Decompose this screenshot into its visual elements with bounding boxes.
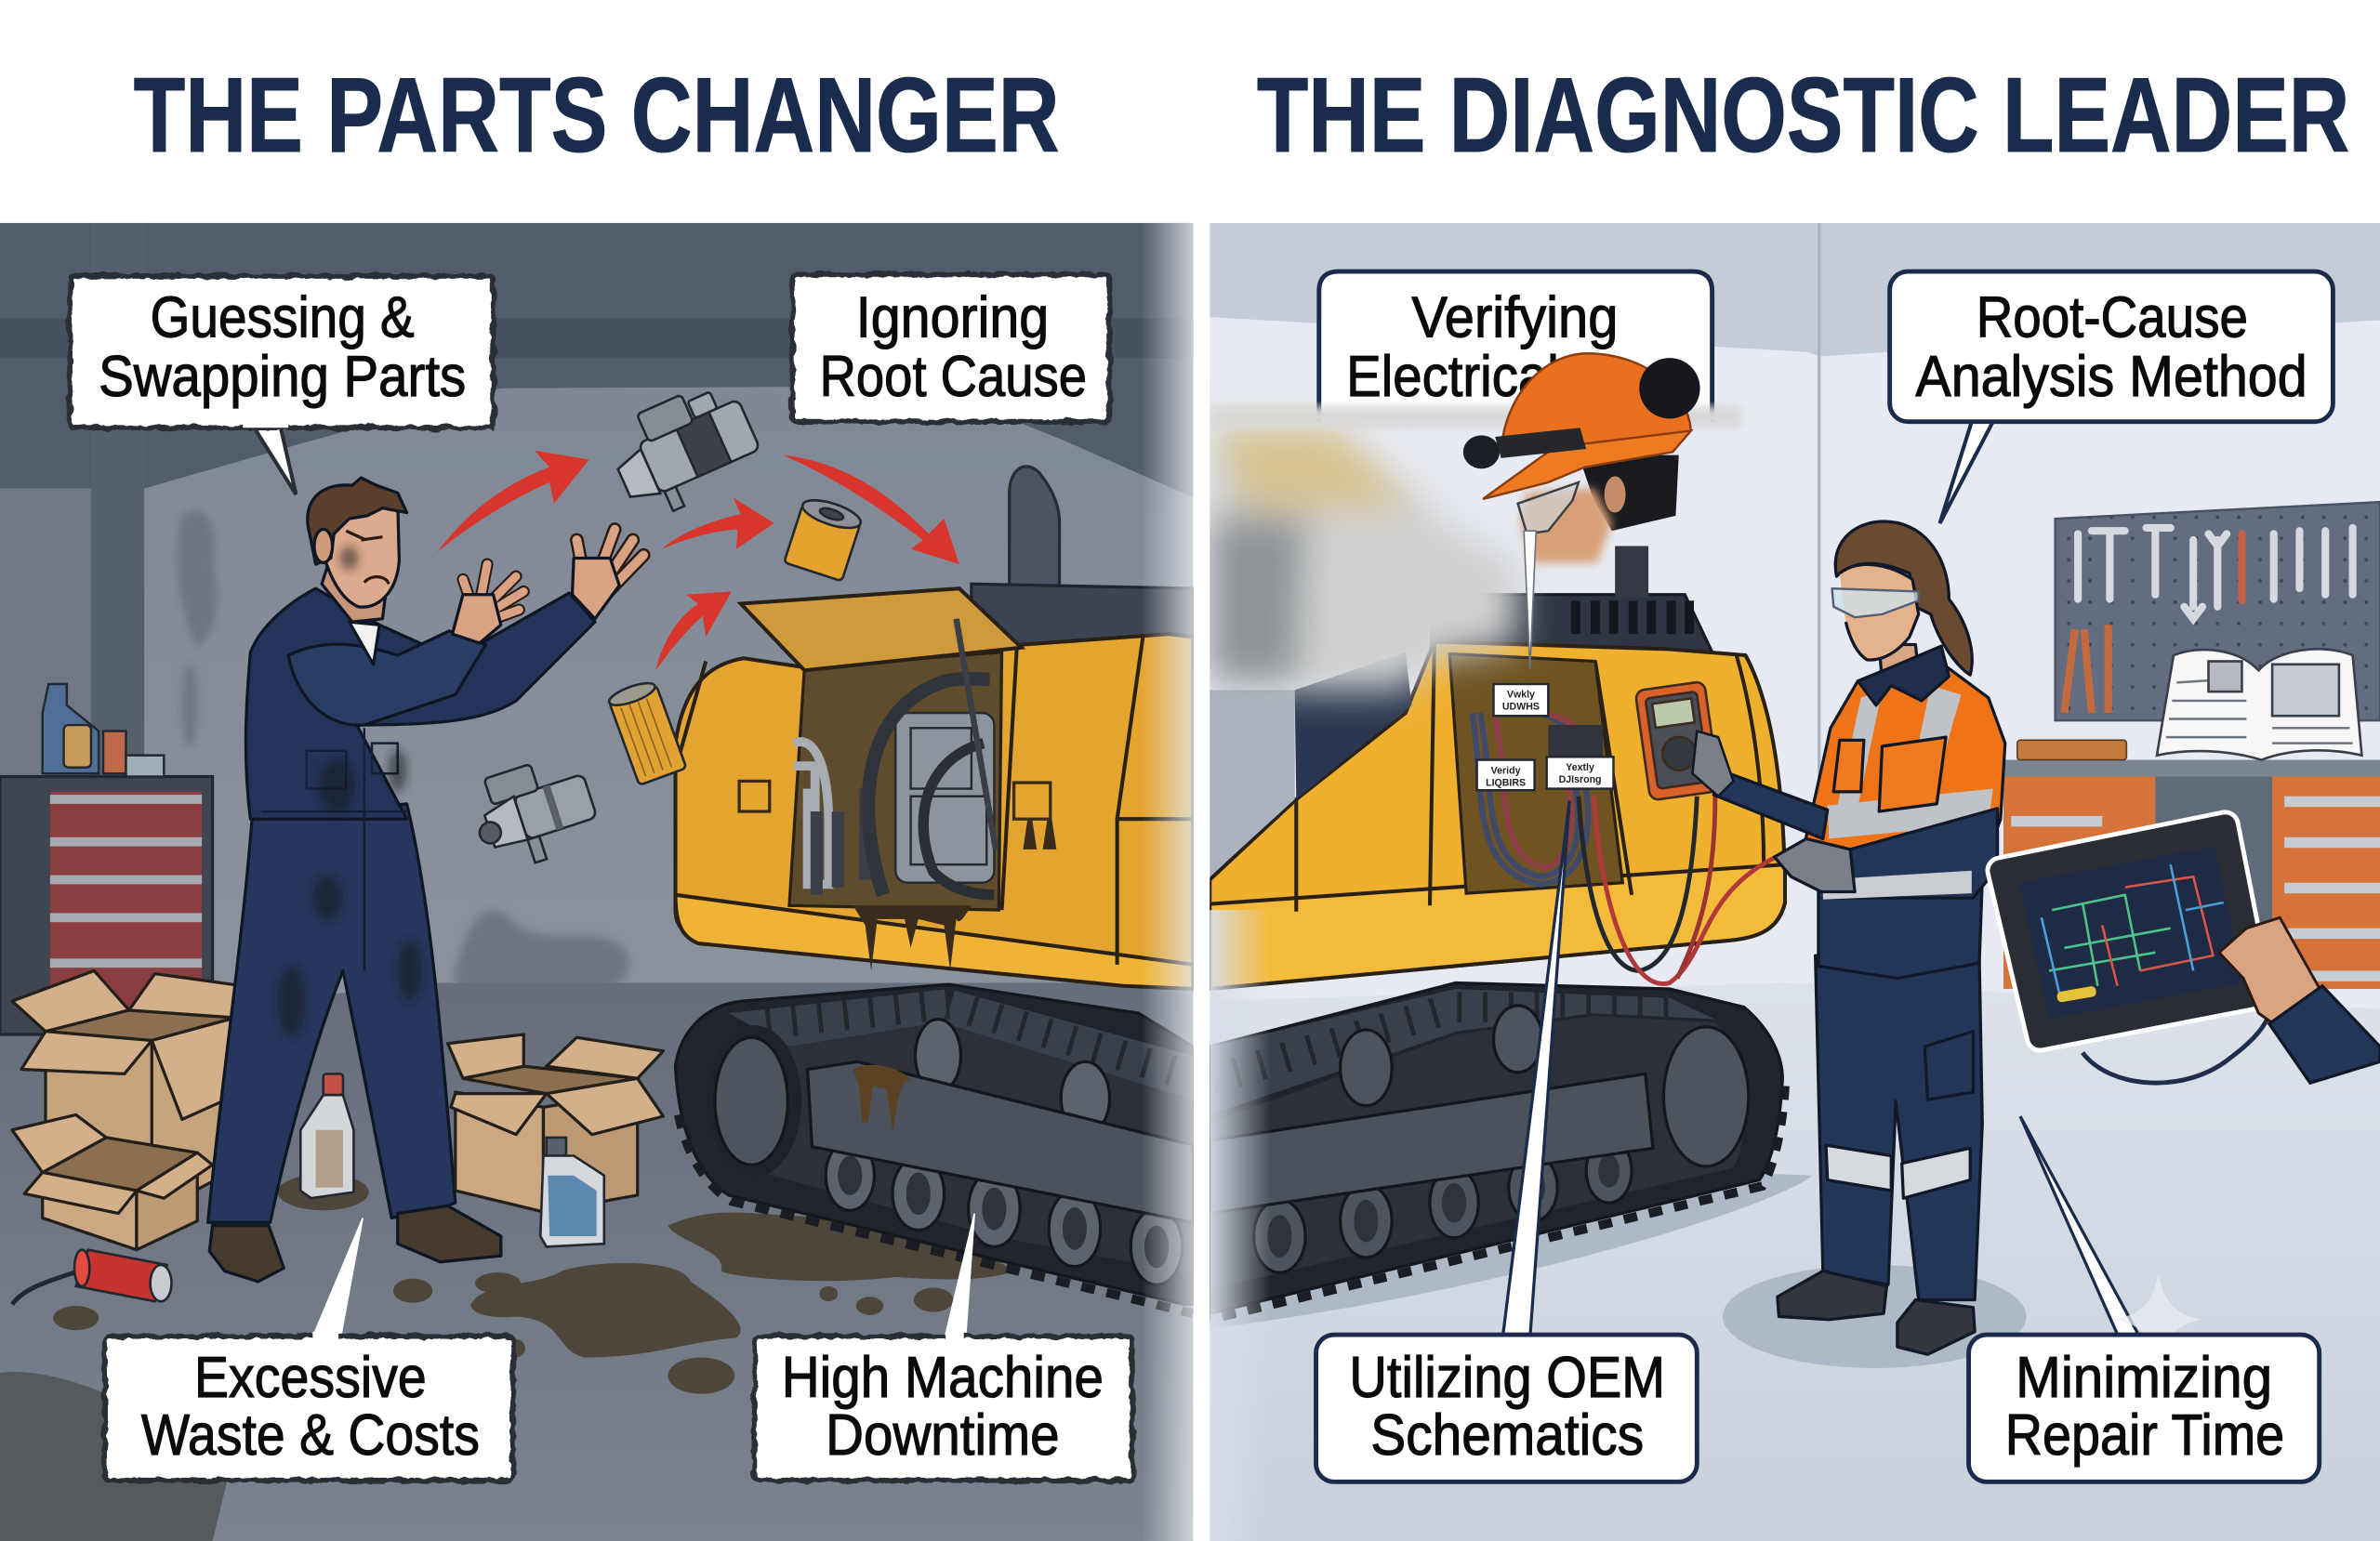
cargo pocket	[1924, 1032, 1973, 1100]
ceiling band	[1210, 223, 2380, 356]
callout: excessive waste and costs	[105, 1218, 513, 1481]
red arrows	[437, 451, 959, 670]
workbench	[2003, 740, 2380, 989]
wiring label three: DJIsrong	[1559, 774, 1602, 785]
icon: oil bottle on floor white	[300, 1073, 353, 1198]
navy lower jacket	[1818, 879, 1982, 979]
blur fade below callout	[1210, 406, 1741, 428]
technician arm holding meter	[1713, 770, 1828, 838]
callout: root cause analysis method: Root-Cause	[1977, 285, 2248, 349]
callout: guessing and swapping parts: Swapping Parts	[99, 345, 466, 409]
icon: coolant jug on floor blue	[540, 1138, 604, 1246]
callout: minimizing repair time	[1969, 1335, 2320, 1482]
orange jacket	[1805, 667, 2005, 888]
excavator exhaust stump	[1615, 546, 1648, 598]
workshop wall	[0, 223, 1193, 1027]
callout: minimizing repair time: Minimizing	[2016, 1346, 2272, 1410]
helmet dome	[1501, 353, 1691, 455]
callout: guessing and swapping parts: Guessing &	[151, 285, 415, 349]
tread bars	[1210, 1008, 1670, 1080]
callout: utilizing oem schematics	[1316, 1335, 1697, 1482]
technician face	[1840, 564, 1919, 660]
mechanic: the parts changer	[208, 478, 643, 1282]
cardboard box middle	[448, 1034, 663, 1212]
callout: high machine downtime: High Machine	[782, 1346, 1104, 1410]
mechanic raised far arm	[357, 593, 595, 725]
panel: the parts changer scene	[0, 223, 1193, 1541]
title: the parts changer: THE PARTS CHANGER	[134, 57, 1060, 175]
floor dark shadow	[0, 1372, 228, 1541]
callout pointer: verifying electrical	[1524, 531, 1536, 669]
excavator exhaust and engine cover	[972, 467, 1193, 667]
dark cab window	[1295, 652, 1411, 799]
wiring label three: Yextly	[1566, 762, 1594, 773]
mechanic boots	[209, 1205, 501, 1282]
cab window glass	[1210, 691, 1295, 876]
raised hood panel	[741, 588, 1022, 670]
hand holding tablet	[2219, 917, 2322, 1032]
technician glove on lead	[1775, 838, 1855, 892]
navy cuff	[2269, 986, 2380, 1083]
headlamp strap	[1495, 428, 1586, 458]
callout: guessing and swapping parts	[70, 276, 494, 494]
dim wall left of column	[0, 488, 91, 792]
wire loops	[1473, 710, 1591, 884]
sparkle mark	[2116, 1274, 2201, 1365]
pegboard	[2056, 502, 2380, 720]
soft fade on panel edge	[1142, 223, 1193, 1541]
callout: excessive waste and costs: Excessive	[194, 1346, 427, 1410]
sleeve reflective band	[1823, 871, 1972, 900]
callout pointer: minimizing repair time	[2020, 1116, 2140, 1337]
mechanic hand near	[463, 564, 523, 622]
mechanic neck and head	[322, 546, 391, 622]
face	[1521, 488, 1612, 562]
worker floor shadow	[1723, 1265, 2027, 1368]
oil puddles	[53, 1174, 1014, 1394]
safety glasses	[1832, 588, 1919, 617]
technician neck	[1879, 645, 1919, 682]
wiring label two: Veridy	[1491, 765, 1521, 776]
wiring label one: UDWHS	[1502, 702, 1540, 713]
callout: utilizing oem schematics: Utilizing OEM	[1349, 1346, 1665, 1410]
coverall grease smudges	[278, 546, 422, 1037]
ear	[1605, 476, 1626, 513]
workshop floor	[0, 982, 1193, 1541]
callout: ignoring root cause: Root Cause	[820, 345, 1087, 409]
icon: flying oil filter top	[784, 494, 864, 581]
callout: high machine downtime: Downtime	[826, 1403, 1060, 1468]
wall panel seam	[1818, 223, 1820, 981]
mechanic torso	[245, 588, 456, 819]
ear defender	[1639, 358, 1700, 418]
open service manual	[2157, 649, 2361, 760]
wiring label one: Vwkly	[1507, 690, 1535, 701]
mechanic legs	[208, 804, 456, 1222]
wiring label three	[1547, 757, 1614, 789]
reflective jacket stripes	[1828, 686, 1993, 838]
steel beam	[0, 319, 1193, 358]
hood support strut	[957, 619, 996, 850]
excavator tracks	[676, 984, 1193, 1313]
hair	[1579, 455, 1679, 531]
cardboard box front left	[12, 1114, 213, 1250]
jacket pockets	[1833, 737, 1946, 811]
technician: the diagnostic leader	[1713, 521, 2005, 1354]
callout: excessive waste and costs: Waste & Costs	[141, 1403, 480, 1468]
multimeter	[1635, 681, 1720, 800]
tread bars	[766, 1004, 1193, 1077]
icon: flying starter motor top	[601, 375, 769, 524]
wall stains	[178, 511, 630, 996]
headlamp	[1463, 435, 1500, 468]
tool cabinet	[0, 777, 213, 1034]
callout: utilizing oem schematics: Schematics	[1370, 1403, 1644, 1468]
callout pointer: root cause analysis	[1940, 422, 1993, 523]
helmet brim	[1483, 430, 1691, 499]
pliers and screwdriver	[2064, 625, 2109, 713]
steel column	[91, 223, 145, 775]
panel edge fade	[1210, 910, 1271, 1541]
glove on multimeter	[1692, 731, 1733, 797]
open engine bay	[789, 652, 1002, 910]
wiring label two: LIQBIRS	[1486, 777, 1526, 788]
icon: flying oil filter bottom	[607, 678, 686, 785]
track teeth	[1210, 1086, 1785, 1320]
jacket collar	[1858, 646, 1949, 705]
excavator counterweight and vents	[1432, 595, 1713, 655]
callout: minimizing repair time: Repair Time	[2005, 1403, 2284, 1468]
safety glasses	[1518, 482, 1579, 533]
blurred cab remnant	[1210, 425, 1518, 691]
tablet cable	[2082, 1004, 2272, 1083]
tablet with schematic	[2001, 825, 2258, 1037]
callout: root cause analysis method: Analysis Method	[1915, 345, 2307, 409]
open electrical bay	[1449, 653, 1622, 893]
warning decals	[739, 781, 1051, 819]
ceiling shadow band	[0, 223, 1193, 497]
technician forearm	[1823, 809, 1998, 898]
technician boots	[1778, 1271, 1975, 1354]
panel: the diagnostic leader scene	[1210, 223, 2380, 1541]
reflective leg strips	[1826, 1145, 1970, 1198]
icon: flying starter motor bottom	[464, 749, 604, 876]
hanging tools	[2078, 528, 2353, 619]
mechanic raised near arm	[288, 631, 485, 725]
excavator tracks	[1210, 982, 1785, 1320]
callout: ignoring root cause: Ignoring	[856, 285, 1049, 349]
callout: verifying electrical: Electrical	[1346, 345, 1559, 409]
technician ponytail and hair	[1835, 521, 1972, 675]
white undershirt	[350, 622, 379, 665]
pockets and seams	[261, 728, 407, 970]
track teeth	[679, 1114, 1193, 1313]
test leads	[1579, 797, 1776, 983]
excavator body	[676, 634, 1193, 989]
excavator body	[1210, 641, 1785, 989]
callout: high machine downtime	[754, 1214, 1132, 1481]
wiring label two	[1477, 760, 1535, 790]
icon: oil bottles on cabinet	[43, 684, 164, 777]
wiring label one	[1494, 684, 1548, 716]
technician legs	[1816, 955, 1982, 1300]
track floor shadow	[1210, 1152, 1812, 1329]
cardboard box back left	[12, 970, 243, 1214]
hard hat worker fragment	[1463, 353, 1700, 562]
icon: red canister on floor	[12, 1250, 171, 1304]
callout: ignoring root cause	[792, 274, 1109, 422]
callout: verifying electrical	[1319, 271, 1712, 422]
mechanic hand far	[576, 530, 643, 599]
callout pointer: utilizing oem schematics	[1502, 801, 1569, 1337]
callout: root cause analysis method	[1890, 271, 2333, 422]
oil drips	[853, 819, 1056, 970]
bright floor	[1210, 982, 2380, 1541]
callout: verifying electrical: Verifying	[1411, 285, 1618, 349]
bright workshop wall	[1210, 223, 2380, 1011]
